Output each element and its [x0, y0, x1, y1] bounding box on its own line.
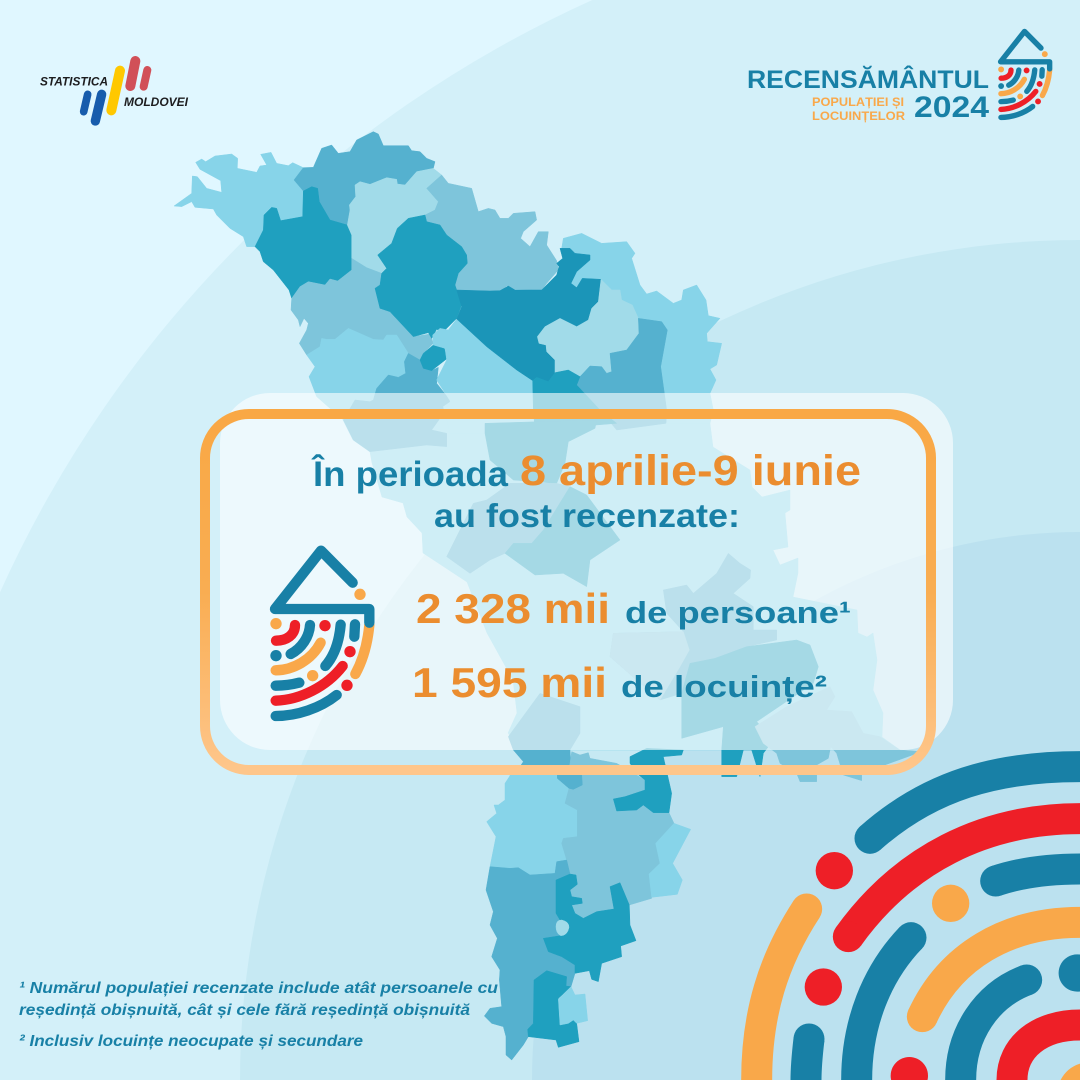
heading text: 8 aprilie-9 iunie — [520, 447, 861, 495]
footnotes: reședință obișnuită, cât și cele fără reședință obișnuită — [19, 1002, 470, 1019]
statistic: dwellings: 1 595 mii — [412, 659, 607, 706]
statistic: dwellings — [412, 659, 827, 706]
map: central silhouette — [343, 395, 900, 750]
decorative corner fingerprint arcs — [757, 767, 1080, 1080]
translucent white panel — [220, 393, 953, 750]
heading text: În perioada — [311, 454, 509, 494]
logo: Recensământul 2024: LOCUINȚELOR — [812, 109, 905, 123]
logo: Recensământul 2024: RECENSĂMÂNTUL — [747, 64, 989, 94]
statistic: persons: de persoane¹ — [625, 595, 851, 630]
map of Moldova by regions — [174, 132, 922, 1060]
statistic: dwellings: de locuințe² — [621, 669, 827, 704]
map: north-east regions — [433, 233, 722, 433]
logo: Recensământul 2024 — [747, 31, 1050, 124]
logo: Statistica Moldovei — [40, 61, 189, 121]
footnotes — [19, 980, 498, 1050]
logo: Statistica Moldovei: MOLDOVEI — [124, 95, 189, 109]
footnotes: ² Inclusiv locuințe neocupate și secundare — [19, 1033, 363, 1050]
map: south-east strip below panel — [755, 687, 922, 782]
statistic: persons: 2 328 mii — [416, 585, 610, 632]
orange rounded frame — [205, 414, 931, 770]
footnotes: ¹ Numărul populației recenzate include atât persoanele cu — [19, 980, 498, 997]
icon: census house fingerprint — [270, 551, 369, 716]
logo: Recensământul 2024: POPULAȚIEI ȘI — [812, 95, 904, 109]
statistic: persons — [416, 585, 851, 632]
logo: Statistica Moldovei: STATISTICA — [40, 74, 108, 88]
map: northern regions — [174, 132, 558, 452]
logo: Recensământul 2024: 2024 — [914, 91, 990, 124]
map: central regions seen through panel — [447, 420, 818, 777]
heading text: au fost recenzate: — [434, 497, 740, 534]
map: southern regions — [484, 748, 691, 1060]
heading text — [311, 447, 861, 534]
